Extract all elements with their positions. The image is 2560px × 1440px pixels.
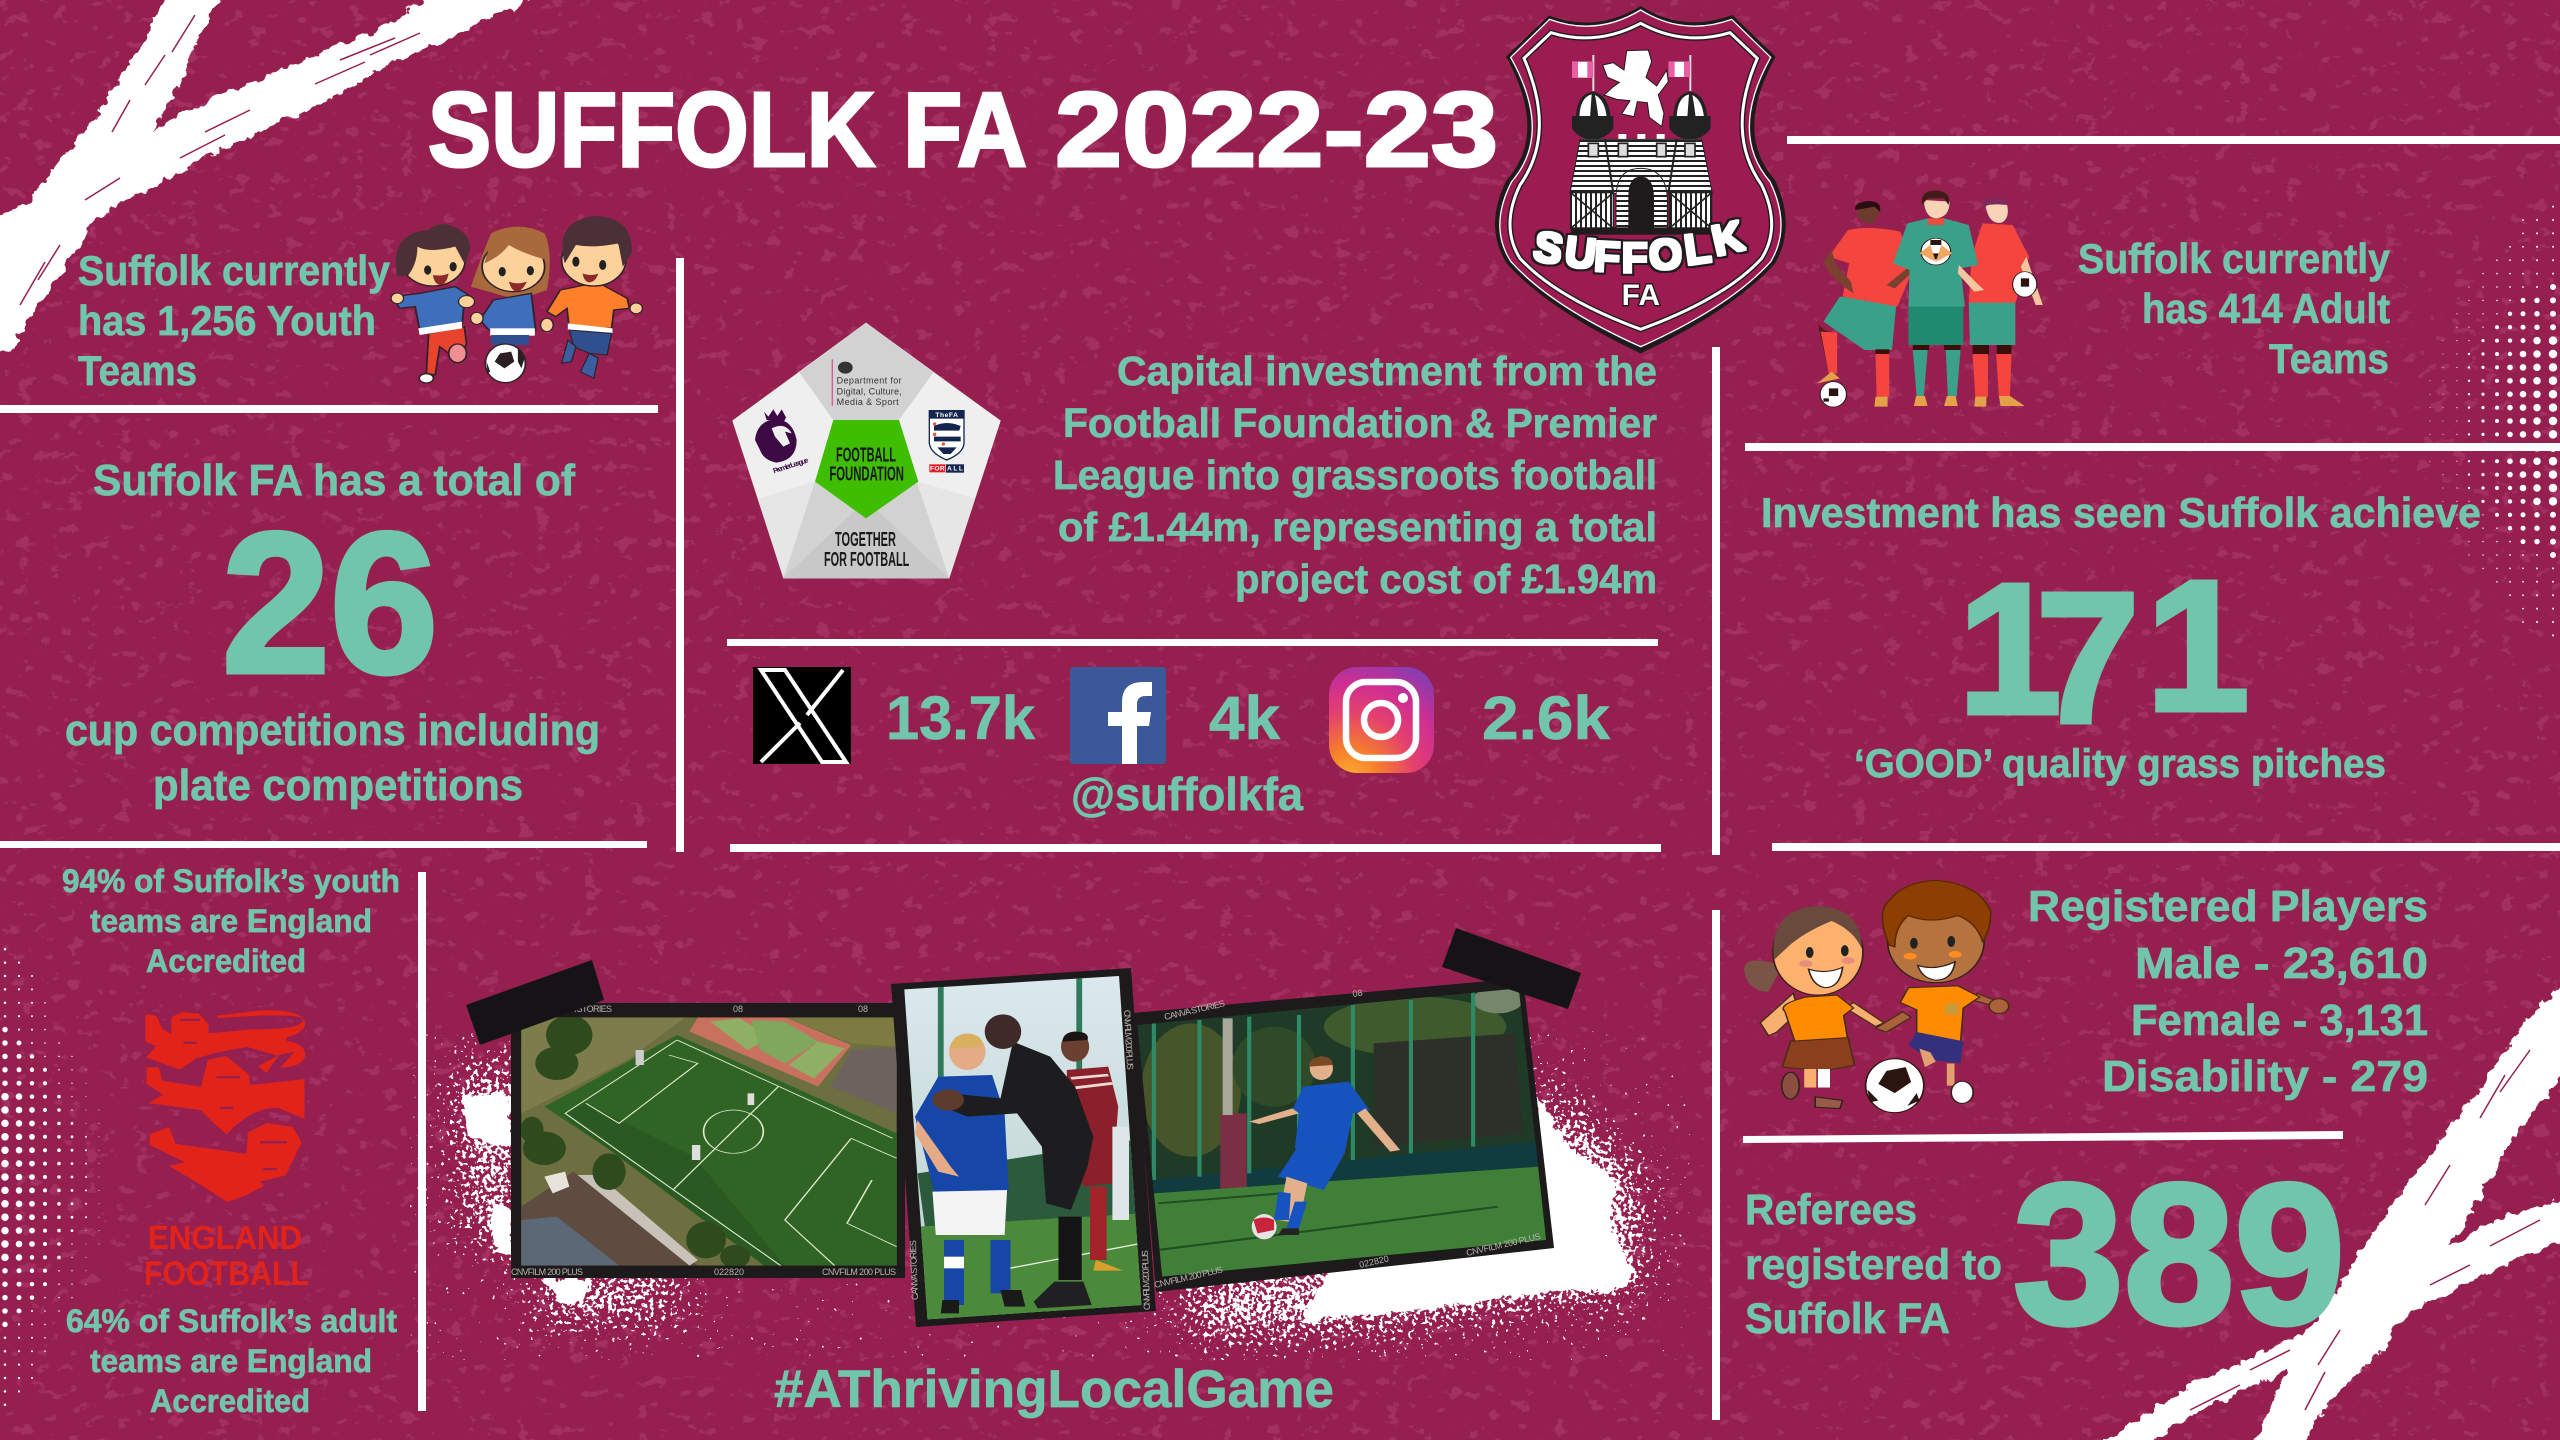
stat: 171 good quality pitches: 171 [1958,543,2249,762]
castle [1570,92,1712,235]
text: youth teams: has 1,256 Youth [78,297,376,344]
stat: referees: Referees [1745,1186,1917,1234]
text: capital investment: of £1.44m, representing a total [1058,504,1657,550]
stat: 26 cup competitions: plate competitions [153,761,523,810]
logo: Together for Football pentagon: Premier League [772,455,809,475]
chalk strokes bottom-right [2090,975,2560,1440]
stat: 171 good quality pitches [1761,489,2481,786]
icon: X [753,667,851,764]
text: capital investment: Football Foundation & Premier [1063,400,1657,446]
text: england accredited adult: Accredited [150,1383,310,1419]
logo: Together for Football pentagon: Media & Sport [837,397,899,407]
stat: Facebook followers: 4k [1209,684,1280,752]
tape right [1442,928,1581,1009]
text: registered players [2028,882,2428,1101]
text: registered players: Registered Players [2028,882,2428,931]
photo: player kicking ball [1133,978,1556,1292]
text: england accredited youth: Accredited [146,943,306,979]
crest FA: FA [1622,279,1660,312]
text: adult teams: Suffolk currently [2078,235,2391,282]
text: capital investment [1053,348,1657,602]
text: registered players: Disability - 279 [2102,1052,2428,1101]
photo: aerial view of pitch: 08 [858,1004,868,1014]
icon: Facebook [1070,667,1166,764]
logo: Together for Football pentagon: Digital, Culture, [837,386,902,396]
text: england accredited youth [62,863,400,979]
stat: Instagram followers: 2.6k [1482,684,1610,752]
photo: referee speaking to players: CNVFILM 200 PLUS [1122,1010,1135,1070]
title: FA [903,71,1027,189]
photo strip: grassroots football photos [466,928,1581,1327]
photo: referee speaking to players [884,968,1158,1327]
lion rampant [1603,50,1668,127]
photo: aerial view of pitch [511,1003,905,1278]
crest wordmark: SUFFOLK [1530,212,1748,283]
logo: Together for Football pentagon: TheFA [935,412,958,419]
text: adult teams: has 414 Adult [2142,285,2390,332]
stat: 171 good quality pitches: Investment has seen Suffolk achieve [1761,489,2481,536]
text: capital investment: Capital investment from the [1117,348,1657,394]
text: capital investment: League into grassroots football [1053,452,1657,498]
title: SUFFOLK [428,71,875,189]
halftone dots left [5,949,99,1406]
stat: 26 cup competitions: 26 [222,492,438,715]
photo: referee speaking to players: CNVFILM 200 PLUS [1140,1250,1152,1310]
photo: aerial view of pitch: CNVFILM 200 PLUS [822,1267,896,1277]
text: registered players: Male - 23,610 [2135,939,2428,988]
stat: referees [1745,1143,2345,1366]
title [428,71,1498,189]
photo: aerial view of pitch: A STORIES [570,1004,612,1014]
panel: cup competitions [65,456,600,810]
text: england accredited adult [66,1303,397,1419]
stat: referees: 389 [2013,1143,2345,1366]
paint splatter behind photos [455,1060,1640,1340]
text: youth teams [78,247,391,394]
stat: referees: registered to [1745,1241,2002,1289]
text: adult teams [2078,235,2391,382]
handle: @suffolkfa [1071,768,1303,820]
crest: Suffolk FA shield [1495,6,1786,353]
logo: Together for Football pentagon: ALL [947,466,963,473]
photo: aerial view of pitch: 08 [733,1004,743,1014]
stat: X followers: 13.7k [886,684,1035,752]
logo: Together for Football pentagon: FOR [930,466,945,473]
halftone dots right [2430,207,2553,636]
logo: Together for Football pentagon: FOUNDATION [829,463,904,486]
text: adult teams: Teams [2269,335,2389,382]
photo: aerial view of pitch: 022820 [714,1267,744,1277]
text: youth teams: Teams [78,347,197,394]
stat: 171 good quality pitches: ‘GOOD’ quality grass pitches [1854,742,2386,786]
photo: player kicking ball: CNVFILM 200 PLUS [1153,1264,1224,1290]
logo: England Football: FOOTBALL [144,1255,309,1293]
text: england accredited youth: 94% of Suffolk’s youth [62,863,400,899]
tape left [466,960,604,1045]
logo: Together for Football pentagon: Department for [837,375,902,385]
icon: three cartoon children [391,216,642,383]
photo: player kicking ball: 08 [1352,988,1363,999]
text: england accredited adult: 64% of Suffolk’s adult [66,1303,397,1339]
chalk strokes top-left [0,0,548,355]
stat: 26 cup competitions [65,456,600,810]
photo: aerial view of pitch: CNVFILM 200 PLUS [511,1267,583,1277]
stat: referees: Suffolk FA [1745,1295,1950,1343]
logo: Together for Football pentagon: FOOTBALL [836,444,896,467]
photo: player kicking ball: CANVA STORIES [1163,998,1226,1022]
stat: 26 cup competitions: Suffolk FA has a total of [93,456,575,505]
icon: two cartoon children [1744,880,2009,1113]
text: registered players: Female - 3,131 [2131,996,2428,1045]
photo: referee speaking to players: CANVA STORIES [908,1240,920,1300]
stat: 26 cup competitions: cup competitions including [65,706,600,755]
hashtag: #AThrivingLocalGame [774,1360,1334,1419]
flags [1572,55,1691,91]
icon: three adult footballers [1817,191,2043,407]
text: england accredited adult: teams are England [90,1343,372,1379]
logo: England Football: ENGLAND [148,1219,302,1256]
logo: England Football [143,1008,309,1293]
icon: Instagram [1329,667,1434,773]
logo: Together for Football pentagon: FOR FOOTBALL [824,549,909,571]
title: 2022-23 [1055,71,1498,189]
text: capital investment: project cost of £1.94m [1235,556,1657,602]
photo: player kicking ball: CNVFILM 200 PLUS [1465,1231,1542,1258]
photo: player kicking ball: 022820 [1358,1253,1390,1270]
text: youth teams: Suffolk currently [78,247,391,294]
logo: Together for Football pentagon [732,323,1001,578]
logo: Together for Football pentagon: TOGETHER [835,529,896,551]
text: england accredited youth: teams are England [90,903,372,939]
